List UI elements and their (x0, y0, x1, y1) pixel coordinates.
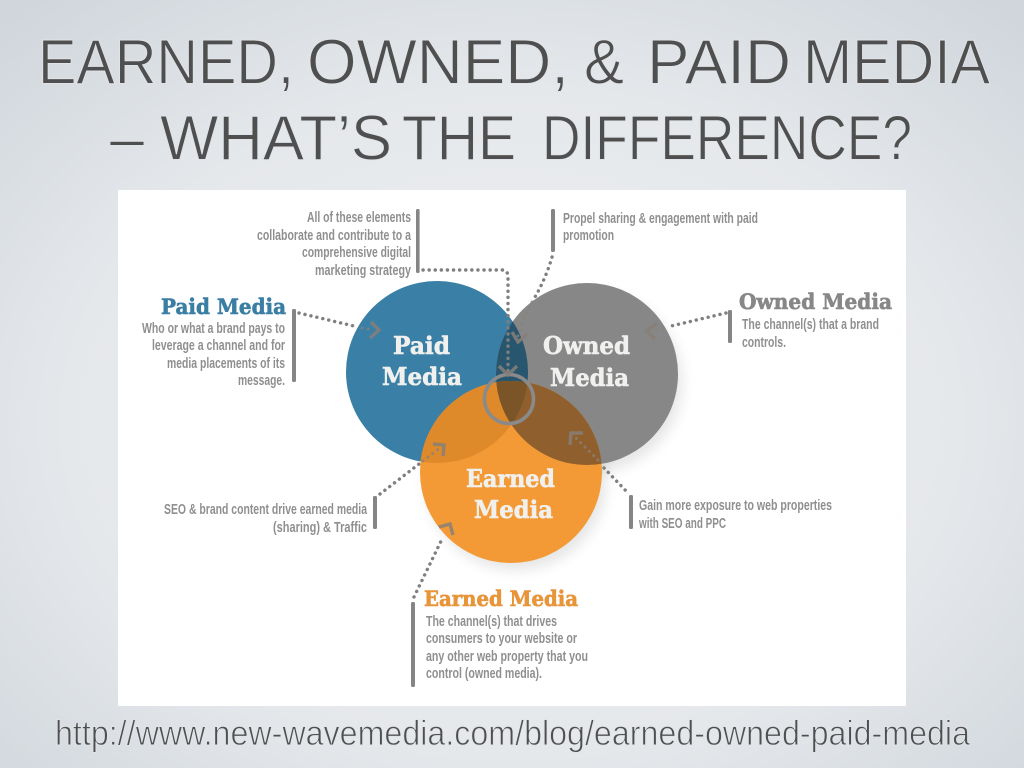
callout: paid media: media placements of its (167, 356, 285, 372)
callout: paid media: Who or what a brand pays to (142, 321, 285, 337)
callout: gain exposure (629, 495, 832, 532)
callout: paid media: Paid Media (161, 294, 286, 319)
title: OWNED, (307, 28, 569, 98)
callout: seo and brand content: (sharing) & Traffic (273, 520, 367, 536)
callout: propel sharing (551, 209, 758, 252)
callout: earned media: consumers to your website or (426, 631, 577, 647)
callout: collaboration note: collaborate and contribute to a (257, 228, 412, 244)
label: paid media: Paid (393, 331, 450, 360)
callout: collaboration note: marketing strategy (315, 263, 411, 279)
label: earned media: Earned (466, 464, 555, 493)
label: earned media: Media (474, 495, 553, 524)
title: & (584, 28, 624, 98)
callout: owned media (728, 289, 892, 351)
title: EARNED, (38, 28, 294, 98)
title: WHAT’S (160, 104, 392, 174)
arrow: collaboration note to centre (423, 270, 517, 375)
callout: seo and brand content (164, 496, 377, 536)
ring at centre (484, 374, 534, 424)
callout: collaboration note (257, 209, 420, 279)
overlap: owned and earned (496, 381, 602, 465)
arrow: earned media (414, 524, 453, 597)
circle: paid media (346, 281, 528, 463)
callout: owned media: Owned Media (739, 289, 892, 314)
arrow: seo and brand content (380, 444, 444, 494)
title: DIFFERENCE? (542, 104, 912, 174)
overlap: paid and owned (496, 322, 528, 382)
panel: white infographic card (118, 190, 906, 706)
arrow: owned media (647, 313, 726, 339)
callout: earned media: The channel(s) that drives (426, 614, 557, 630)
title: PAID (647, 28, 791, 98)
callout: owned media: controls. (742, 335, 786, 351)
callout: gain exposure: Gain more exposure to web properties (639, 498, 832, 514)
callout: collaboration note: All of these elements (307, 210, 411, 226)
title: – (110, 104, 144, 174)
venn diagram (346, 281, 682, 570)
title: MEDIA (803, 28, 990, 98)
callout: owned media: The channel(s) that a brand (742, 317, 879, 333)
label: paid media: Media (382, 362, 462, 391)
callout: paid media (142, 294, 296, 389)
callout: paid media: message. (238, 373, 285, 389)
circle: earned media (420, 381, 602, 563)
source url: http://www.new-wavemedia.com/blog/earned-owned-paid-media (55, 714, 970, 753)
callout: earned media (411, 586, 588, 687)
arrow: propel sharing (512, 257, 552, 342)
callout: earned media: any other web property that you (426, 649, 588, 665)
title: THE (402, 104, 516, 174)
callout: paid media: leverage a channel and for (152, 338, 285, 354)
callout: propel sharing: promotion (563, 228, 614, 244)
callout: gain exposure: with SEO and PPC (638, 516, 726, 532)
overlap: paid and earned (420, 381, 524, 463)
label: owned media: Media (550, 363, 629, 392)
circle: owned media (496, 283, 678, 465)
title (38, 28, 990, 174)
arrow: paid media (299, 313, 379, 338)
overlap: all three (496, 381, 527, 422)
arrow: gain exposure (570, 433, 628, 493)
callout: propel sharing: Propel sharing & engagement with paid (563, 211, 758, 227)
callout: earned media: Earned Media (424, 586, 578, 611)
callout: seo and brand content: SEO & brand content drive earned media (164, 502, 368, 518)
callout: earned media: control (owned media). (426, 666, 542, 682)
callout: collaboration note: comprehensive digital (302, 245, 411, 261)
label: owned media: Owned (543, 331, 630, 360)
